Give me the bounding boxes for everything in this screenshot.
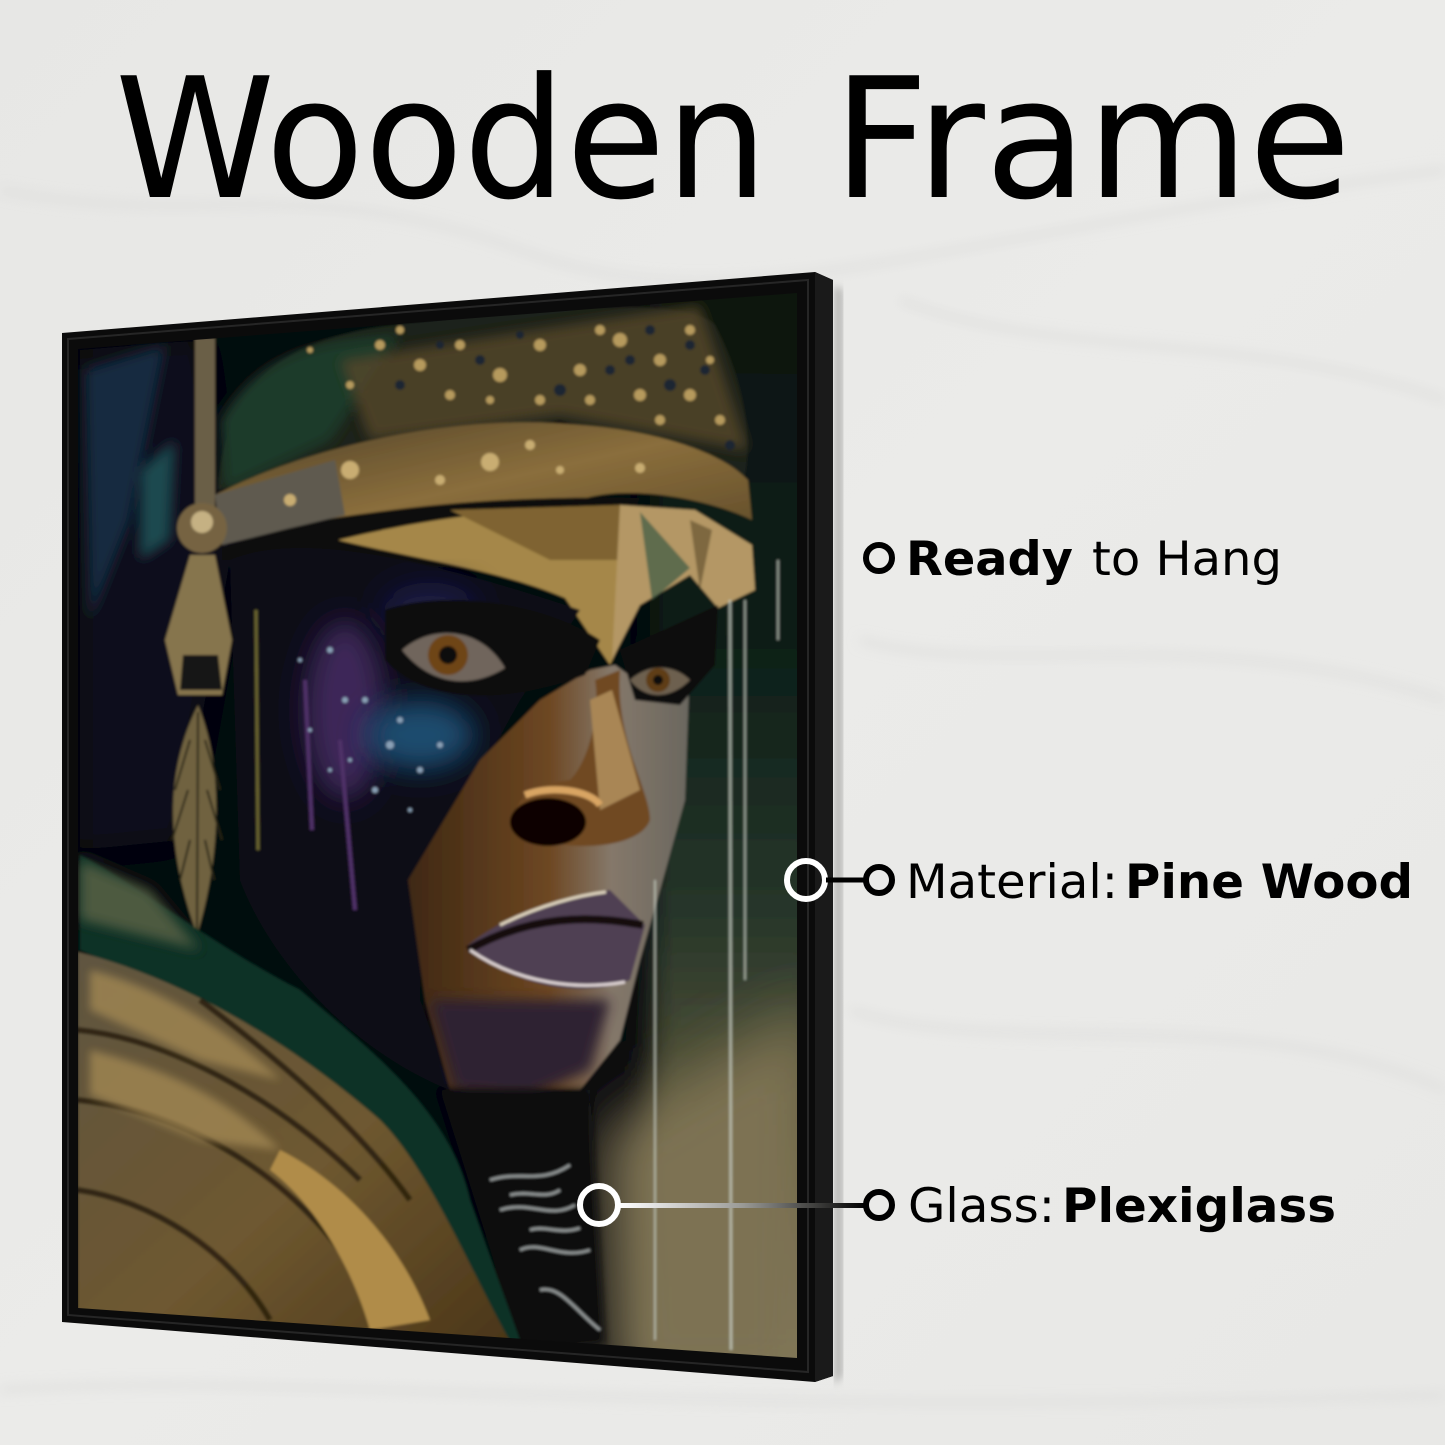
painting base [78, 305, 673, 1342]
brow shadow [222, 496, 639, 574]
face skin [408, 660, 690, 1090]
callout: Ready to Hang: Ready [906, 532, 1073, 587]
callout: Material Pine Wood: Material: [906, 855, 1118, 910]
callout: Material Pine Wood: Pine Wood [1125, 855, 1413, 910]
face dark side painted blue-purple [230, 548, 580, 1090]
painting drips [655, 560, 778, 1350]
feather pin and pendant [165, 338, 232, 935]
green scarf [80, 855, 520, 1340]
chin [430, 1000, 610, 1095]
frame shadow [835, 285, 842, 1385]
helmet dome [218, 307, 747, 490]
gold cloak [78, 952, 512, 1345]
framed artwork [60, 270, 842, 1400]
lips [468, 890, 645, 989]
callout: Ready to Hang [866, 532, 1282, 587]
hair dark blue [80, 340, 230, 850]
helmet brow plate [338, 508, 640, 665]
callout: Glass Plexiglass [580, 1179, 1336, 1234]
title [115, 43, 1351, 237]
helmet rivets [307, 325, 725, 425]
callout: Glass Plexiglass: Glass: [908, 1179, 1055, 1234]
helmet band [215, 422, 752, 545]
callout: Material Pine Wood [787, 855, 1413, 910]
painting: warrior portrait [78, 293, 797, 1358]
eyes [402, 633, 505, 681]
title: Wooden [115, 43, 768, 237]
title: Frame [833, 43, 1351, 237]
black frame [62, 272, 833, 1382]
painting green-olive background [650, 270, 820, 1380]
eye socket shadow [385, 600, 600, 696]
nose [514, 670, 650, 846]
callout: Ready to Hang: to Hang [1092, 532, 1282, 587]
neck dark [440, 1090, 605, 1345]
callout: Glass Plexiglass: Plexiglass [1062, 1179, 1336, 1234]
